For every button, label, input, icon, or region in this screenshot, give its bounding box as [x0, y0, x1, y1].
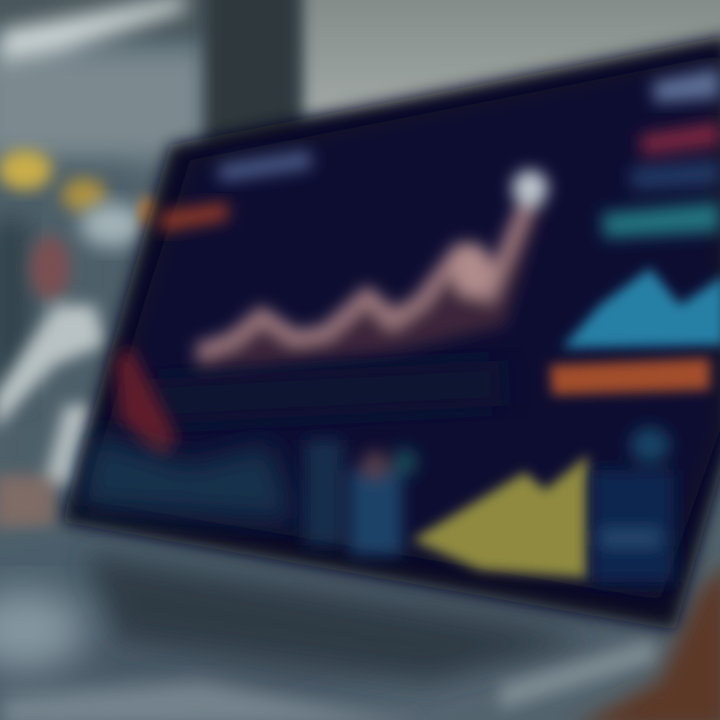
right panel: blue area chart [562, 268, 720, 348]
laptop screen [62, 35, 720, 630]
right panel: bars [602, 122, 720, 238]
person at left [0, 236, 105, 540]
bokeh lights [0, 150, 161, 247]
keyboard base [0, 525, 680, 720]
line chart [190, 170, 548, 370]
wooden desk corner [570, 560, 720, 720]
yellow area chart [412, 455, 588, 578]
red chart at lower left of screen [115, 345, 178, 460]
header label [218, 150, 312, 182]
orange tag [160, 202, 228, 232]
right panel: orange bars [550, 358, 710, 395]
lower right blue panel [592, 427, 674, 582]
lower blue area chart [78, 435, 295, 520]
right panel: header label [652, 68, 720, 103]
lower bars [305, 440, 417, 555]
